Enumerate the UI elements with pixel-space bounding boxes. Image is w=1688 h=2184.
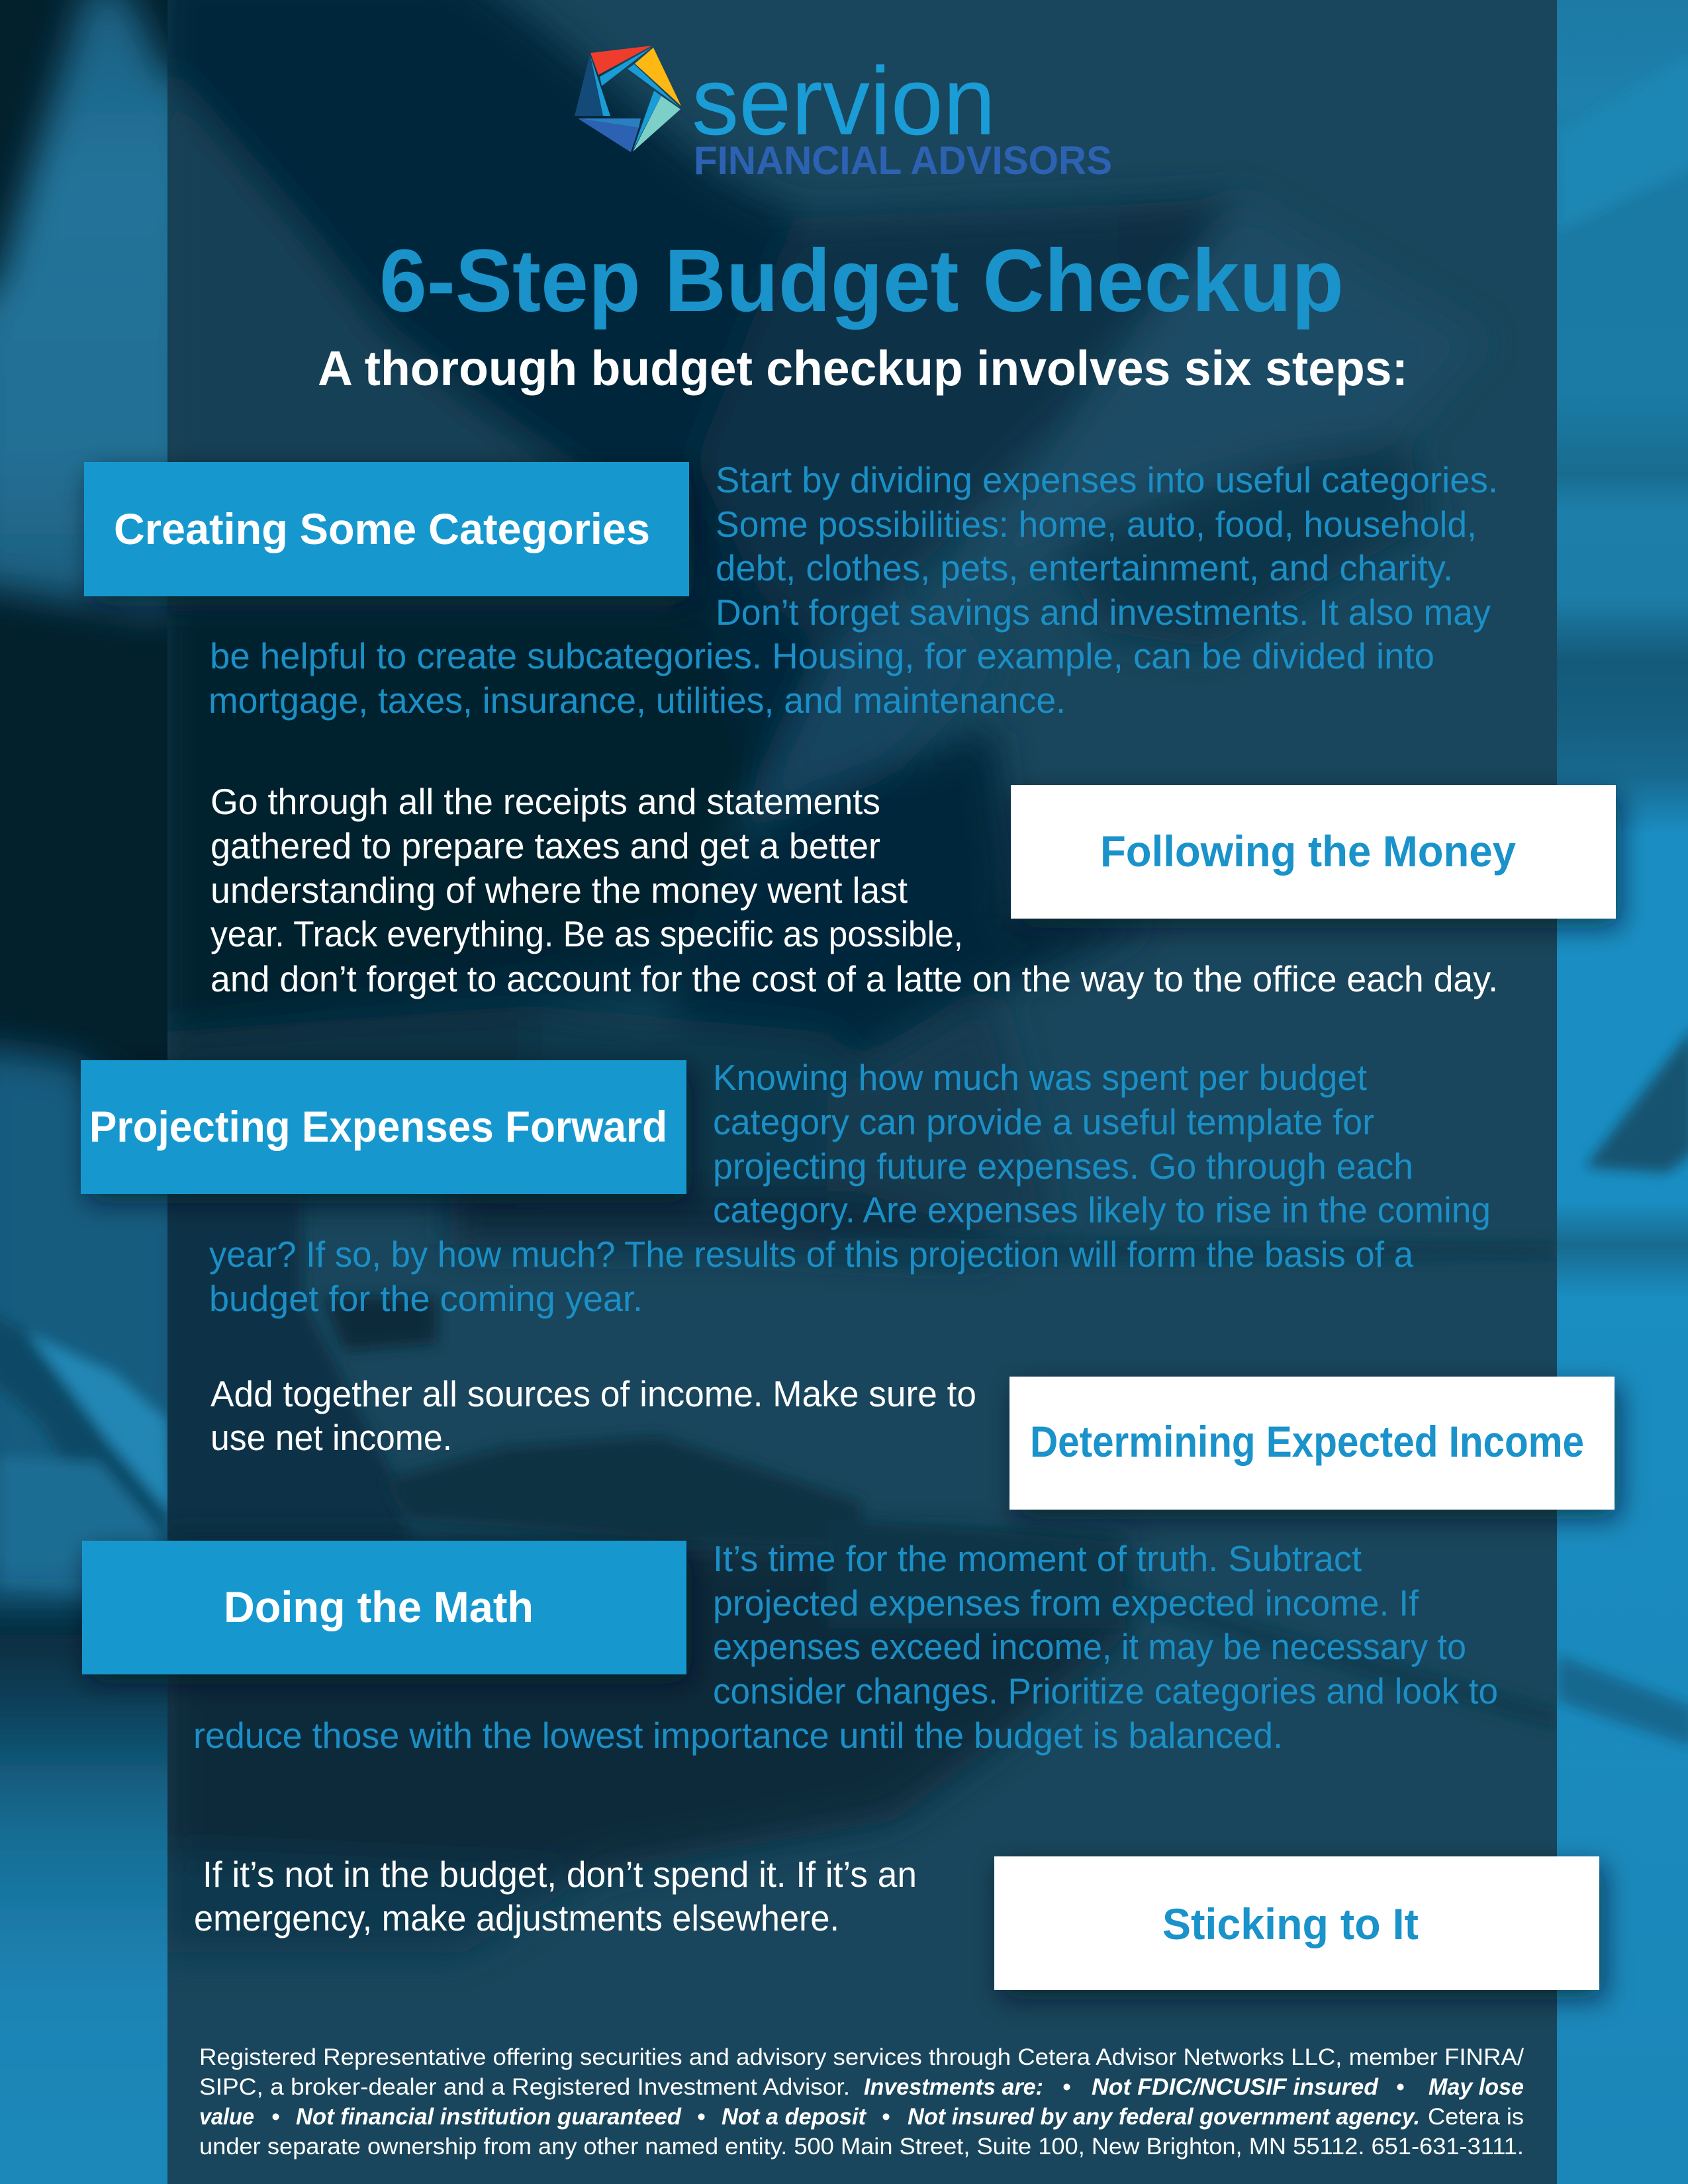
panel: step 4 determining expected income: [211, 1373, 1615, 1510]
footer disclosure text: under separate ownership from any other named entity. 500 Main Street, Suite 100, New Brighton, MN 55112. 651-631-3111.: [199, 2134, 1524, 2160]
heading box: doing the math: Doing the Math: [224, 1582, 534, 1631]
text block: step 1 body: be helpful to create subcategories. Housing, for example, can be divided into: [210, 635, 1434, 676]
footer disclosure text: •: [1396, 2074, 1404, 2100]
heading box: doing the math: [82, 1541, 686, 1674]
footer disclosure text: Cetera is: [1428, 2104, 1524, 2130]
icon: logo pinwheel: [575, 46, 681, 152]
heading box: determining expected income: [1009, 1377, 1615, 1510]
background photo: left strip: [0, 0, 167, 2184]
heading box: sticking to it: [994, 1856, 1599, 1990]
logo wordmark: financial advisors: FINANCIAL ADVISORS: [694, 138, 1112, 183]
heading box: creating some categories: [84, 462, 689, 596]
background photo: right strip: [1557, 0, 1688, 2184]
text block: step 6 body: emergency, make adjustments elsewhere.: [194, 1897, 839, 1938]
heading box: determining expected income: Determining Expected Income: [1030, 1417, 1584, 1466]
footer disclosure text: Not FDIC/NCUSIF insured: [1092, 2074, 1379, 2100]
text block: step 5 body: projected expenses from expected income. If: [713, 1582, 1419, 1623]
heading box: following the money: Following the Money: [1100, 827, 1516, 876]
text block: step 3 body: projecting future expenses. Go through each: [713, 1146, 1413, 1187]
panel: step 2 following the money: [211, 781, 1616, 999]
text block: step 5 body: consider changes. Prioritize categories and look to: [713, 1670, 1498, 1711]
footer disclosure text: •: [697, 2104, 705, 2130]
text block: step 2 body: year. Track everything. Be as specific as possible,: [211, 913, 963, 954]
footer disclosure text: [199, 2044, 1524, 2160]
text block: step 2 body: [211, 781, 1498, 999]
heading box: sticking to it: Sticking to It: [1162, 1899, 1419, 1948]
background photo: dark central panel: [167, 0, 1553, 1958]
title: 6-Step Budget Checkup: [379, 232, 1344, 330]
panel: step 6 sticking to it: [194, 1854, 1599, 1990]
text block: step 4 body: use net income.: [211, 1417, 452, 1458]
text block: step 1 body: debt, clothes, pets, entertainment, and charity.: [716, 547, 1453, 588]
text block: step 3 body: category can provide a useful template for: [713, 1101, 1374, 1142]
text block: step 5 body: [193, 1538, 1498, 1756]
text block: step 1 body: Don’t forget savings and investments. It also may: [716, 592, 1491, 633]
text block: step 2 body: Go through all the receipts and statements: [211, 781, 880, 822]
subtitle: A thorough budget checkup involves six steps:: [318, 341, 1408, 396]
footer disclosure text: •: [882, 2104, 890, 2130]
text block: step 2 body: understanding of where the money went last: [211, 870, 908, 911]
text block: step 3 body: category. Are expenses likely to rise in the coming: [713, 1189, 1491, 1230]
heading box: creating some categories: Creating Some Categories: [114, 504, 650, 553]
text block: step 6 body: [194, 1854, 917, 1938]
heading box: projecting expenses forward: Projecting Expenses Forward: [89, 1102, 667, 1151]
panel: step 3 projecting expenses forward: [81, 1057, 1491, 1319]
text block: step 6 body: If it’s not in the budget, don’t spend it. If it’s an: [203, 1854, 917, 1895]
text block: step 2 body: gathered to prepare taxes and get a better: [211, 825, 880, 866]
text block: step 1 body: Some possibilities: home, auto, food, household,: [716, 504, 1477, 545]
text block: step 5 body: reduce those with the lowest importance until the budget is balanced.: [193, 1715, 1283, 1756]
text block: step 3 body: year? If so, by how much? The results of this projection will form the basis of a: [209, 1234, 1413, 1275]
text block: step 3 body: [209, 1057, 1491, 1319]
panel: step 1 creating some categories: [84, 459, 1498, 721]
text block: step 4 body: [211, 1373, 976, 1458]
footer disclosure text: SIPC, a broker-dealer and a Registered Investment Advisor.: [199, 2074, 850, 2100]
logo: [575, 46, 1112, 183]
text block: step 2 body: and don’t forget to account for the cost of a latte on the way to the office each day.: [211, 958, 1498, 999]
heading box: projecting expenses forward: [81, 1060, 686, 1194]
text block: step 1 body: [209, 459, 1498, 721]
heading box: following the money: [1011, 785, 1616, 919]
footer disclosure text: •: [1062, 2074, 1070, 2100]
logo wordmark: servion: servion: [692, 47, 996, 155]
footer disclosure text: Not financial institution guaranteed: [296, 2104, 682, 2130]
text block: step 3 body: Knowing how much was spent per budget: [713, 1057, 1367, 1098]
panel: step 5 doing the math: [82, 1538, 1498, 1756]
footer disclosure text: •: [271, 2104, 279, 2130]
text block: step 1 body: Start by dividing expenses into useful categories.: [716, 459, 1498, 500]
text block: step 3 body: budget for the coming year.: [209, 1278, 643, 1319]
text block: step 5 body: It’s time for the moment of truth. Subtract: [713, 1538, 1362, 1579]
footer disclosure text: Not a deposit: [722, 2104, 867, 2130]
footer disclosure text: value: [199, 2104, 254, 2130]
footer disclosure text: May lose: [1429, 2074, 1524, 2100]
text block: step 4 body: Add together all sources of income. Make sure to: [211, 1373, 976, 1414]
footer disclosure text: Registered Representative offering securities and advisory services through Cetera Advisor Networks LLC, member FINRA/: [199, 2044, 1524, 2070]
text block: step 1 body: mortgage, taxes, insurance, utilities, and maintenance.: [209, 680, 1066, 721]
text block: step 5 body: expenses exceed income, it may be necessary to: [713, 1626, 1466, 1667]
footer disclosure text: Investments are:: [864, 2074, 1043, 2100]
footer disclosure text: Not insured by any federal government agency.: [908, 2104, 1420, 2130]
